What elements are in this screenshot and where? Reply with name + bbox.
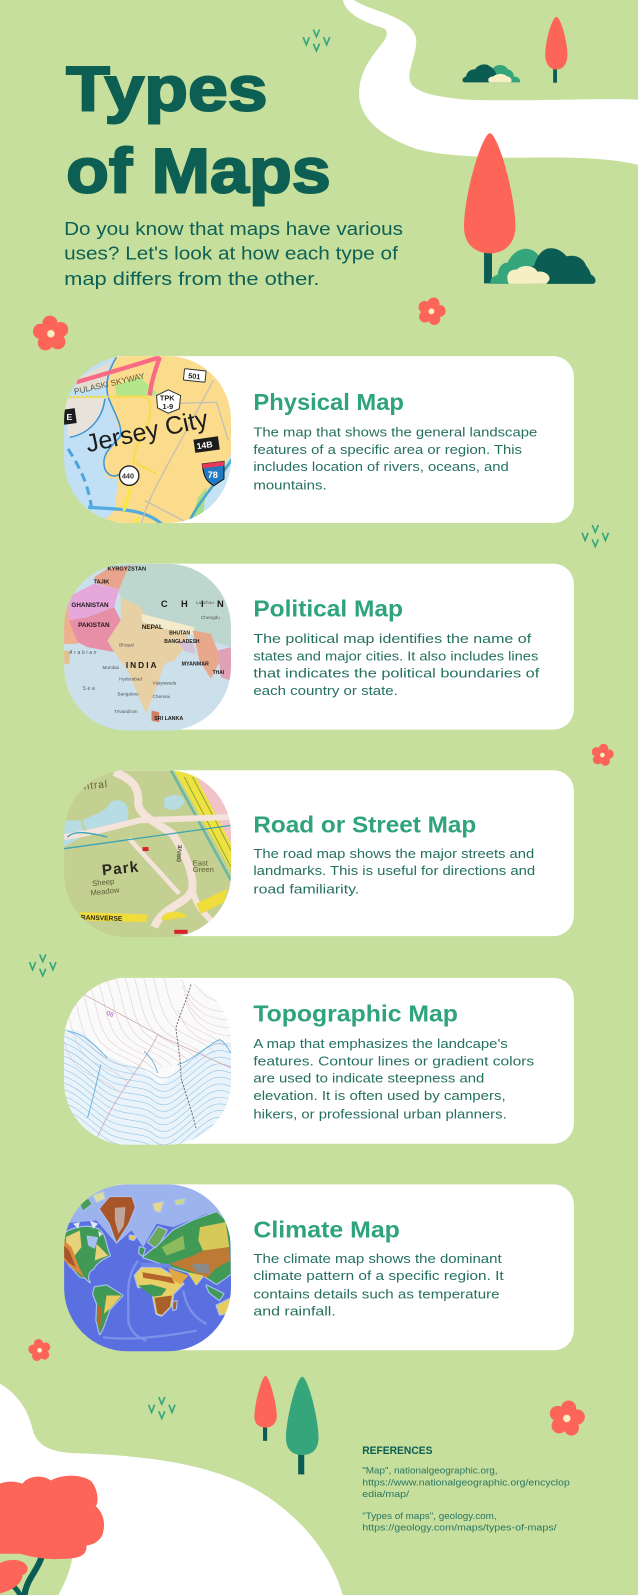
map image: central park: RANSVERSE bbox=[81, 914, 123, 923]
eurasia bbox=[143, 1212, 231, 1284]
place labels: TAJIK bbox=[93, 580, 110, 586]
heading: Climate Map bbox=[253, 1216, 400, 1242]
map image: world relief bbox=[64, 1184, 231, 1352]
references heading: REFERENCES bbox=[362, 1445, 433, 1457]
large bush bbox=[490, 248, 596, 284]
card: climate map bbox=[60, 1180, 574, 1361]
title: of Maps bbox=[66, 136, 331, 206]
label 14b: 14B bbox=[196, 439, 213, 451]
description: that indicates the political boundaries of bbox=[253, 666, 540, 681]
description: hikers, or professional urban planners. bbox=[253, 1106, 507, 1121]
card: road or street map bbox=[64, 770, 574, 937]
description: climate pattern of a specific region. It bbox=[253, 1268, 504, 1283]
map image: india region: Bhopal bbox=[119, 642, 134, 647]
map image: india region: Bangalore bbox=[118, 692, 139, 697]
place labels: INDIA bbox=[126, 660, 159, 670]
place labels: MYANMAR bbox=[182, 662, 209, 668]
white hill bottom left bbox=[0, 1384, 343, 1595]
shield 78: 78 bbox=[208, 470, 218, 480]
map image: india region: Chengdu bbox=[201, 615, 220, 620]
card background bbox=[102, 770, 574, 936]
intro text bbox=[64, 218, 403, 289]
place labels: BHUTAN bbox=[169, 630, 190, 636]
map image: india region: Vijayawada bbox=[153, 681, 177, 686]
description: The road map shows the major streets and bbox=[253, 846, 534, 861]
map image: india region: Trivandrum bbox=[114, 709, 138, 714]
title bbox=[66, 54, 331, 206]
description: elevation. It is often used by campers, bbox=[253, 1088, 506, 1103]
description bbox=[253, 1251, 504, 1319]
north america bbox=[64, 1227, 110, 1282]
description: road familiarity. bbox=[253, 881, 359, 896]
labels: East bbox=[193, 858, 209, 867]
flower 3 bbox=[590, 742, 615, 767]
intro text: map differs from the other. bbox=[64, 268, 320, 289]
reference list: edia/map/ bbox=[362, 1489, 409, 1500]
flower 1 bbox=[415, 294, 448, 327]
shield tpk bbox=[157, 390, 181, 413]
small coral tree bbox=[545, 17, 567, 83]
reference list: "Types of maps", geology.com, bbox=[362, 1511, 497, 1522]
reference list bbox=[362, 1465, 570, 1533]
description: features. Contour lines or gradient colors bbox=[253, 1053, 535, 1068]
shield 440: 440 bbox=[122, 471, 134, 480]
scandinavia bbox=[148, 1227, 167, 1247]
map image: india region bbox=[64, 564, 237, 731]
africa bbox=[135, 1268, 183, 1316]
description: A map that emphasizes the landcape's bbox=[253, 1036, 508, 1051]
reference list: https://geology.com/maps/types-of-maps/ bbox=[362, 1522, 557, 1533]
winding road bbox=[343, 0, 638, 165]
map image: central park: DRIVE bbox=[176, 844, 184, 862]
flower 2 bbox=[32, 314, 70, 351]
map image: india region: Arabian bbox=[68, 650, 98, 656]
map image: india region: Sea bbox=[82, 686, 96, 692]
description bbox=[253, 1036, 535, 1121]
heading: Physical Map bbox=[253, 389, 404, 415]
reference list: https://www.nationalgeographic.org/encyclop bbox=[362, 1478, 570, 1489]
grass tuft bottom bbox=[149, 1397, 175, 1418]
shield tpk: TPK bbox=[160, 394, 175, 403]
grass tuft left bbox=[30, 954, 56, 976]
grass tuft right bbox=[582, 525, 608, 546]
card: topographic map bbox=[64, 978, 574, 1145]
heading: Road or Street Map bbox=[253, 811, 476, 837]
map image: india region: Hyderabad bbox=[119, 677, 142, 682]
heading: Topographic Map bbox=[253, 1001, 458, 1027]
card: physical map bbox=[60, 354, 574, 534]
description: and rainfall. bbox=[253, 1304, 336, 1319]
shield 501: 501 bbox=[188, 371, 201, 381]
grass tuft top bbox=[303, 30, 330, 51]
description: states and major cities. It also includes lines bbox=[253, 648, 539, 663]
labels: entral bbox=[77, 779, 109, 793]
place labels: NEPAL bbox=[142, 624, 163, 631]
big coral tree bbox=[464, 133, 515, 283]
place labels: THAI bbox=[213, 670, 225, 676]
map image: india region: Mumbai bbox=[102, 665, 119, 670]
greenland bbox=[100, 1197, 135, 1242]
label pulaski skyway: PULASKI SKYWAY bbox=[73, 370, 146, 396]
card background bbox=[102, 978, 574, 1144]
bottom green tree bbox=[286, 1377, 318, 1474]
map image: jersey city bbox=[64, 356, 231, 523]
place labels bbox=[71, 566, 237, 722]
shield 78 bbox=[202, 461, 224, 486]
small bush bbox=[462, 64, 520, 82]
card background bbox=[102, 564, 574, 730]
labels: Meadow bbox=[90, 885, 120, 897]
shield tpk: 1-9 bbox=[163, 402, 173, 411]
coral shrub bbox=[0, 1476, 104, 1595]
description: contains details such as temperature bbox=[253, 1286, 500, 1301]
description: mountains. bbox=[253, 477, 327, 492]
map image: india region: Chennai bbox=[153, 694, 170, 699]
intro text: uses? Let's look at how each type of bbox=[64, 242, 399, 263]
description: are used to indicate steepness and bbox=[253, 1071, 484, 1086]
shield 440 bbox=[120, 466, 139, 485]
labels: Sheep bbox=[92, 877, 115, 888]
labels bbox=[77, 779, 214, 897]
heading: Political Map bbox=[253, 596, 403, 622]
map image: india region: Lanzhou bbox=[196, 600, 214, 605]
place labels: KYRGYZSTAN bbox=[107, 566, 146, 572]
contour label: 08 bbox=[105, 1010, 115, 1019]
place labels: PAKISTAN bbox=[78, 622, 110, 629]
description: The map that shows the general landscape bbox=[253, 425, 537, 440]
bottom coral tree bbox=[254, 1376, 277, 1441]
label park: Park bbox=[101, 859, 140, 879]
place labels: CHIN bbox=[161, 599, 237, 609]
description bbox=[253, 846, 535, 896]
shield 501 bbox=[183, 369, 206, 382]
place labels: BANGLADESH bbox=[164, 639, 200, 645]
description: each country or state. bbox=[253, 683, 398, 698]
card: political map bbox=[64, 564, 574, 731]
description: The climate map shows the dominant bbox=[253, 1251, 502, 1266]
references bbox=[362, 1445, 570, 1533]
flower 5 bbox=[547, 1398, 587, 1437]
description: features of a specific area or region. This bbox=[253, 442, 522, 457]
map image: contours bbox=[64, 978, 231, 1145]
description bbox=[253, 425, 537, 492]
title: Types bbox=[66, 54, 268, 124]
arctic islands bbox=[80, 1199, 91, 1210]
map image: jersey city: E bbox=[66, 412, 72, 422]
description bbox=[253, 631, 540, 698]
south america bbox=[93, 1286, 123, 1334]
map image: central park bbox=[64, 770, 231, 937]
label 14b bbox=[193, 436, 220, 453]
description: includes location of rivers, oceans, and bbox=[253, 459, 509, 474]
place labels: GHANISTAN bbox=[71, 602, 109, 609]
terrain colours bbox=[66, 1230, 81, 1256]
label jersey city: Jersey City bbox=[83, 405, 211, 458]
flower 4 bbox=[27, 1337, 52, 1362]
description: The political map identifies the name of bbox=[253, 631, 532, 646]
card background bbox=[102, 356, 574, 523]
reference list: "Map", nationalgeographic.org, bbox=[362, 1465, 498, 1476]
card background bbox=[102, 1184, 574, 1350]
description: landmarks. This is useful for directions and bbox=[253, 863, 535, 878]
intro text: Do you know that maps have various bbox=[64, 218, 403, 239]
labels: Green bbox=[193, 865, 214, 874]
place labels: SRI LANKA bbox=[154, 716, 183, 722]
